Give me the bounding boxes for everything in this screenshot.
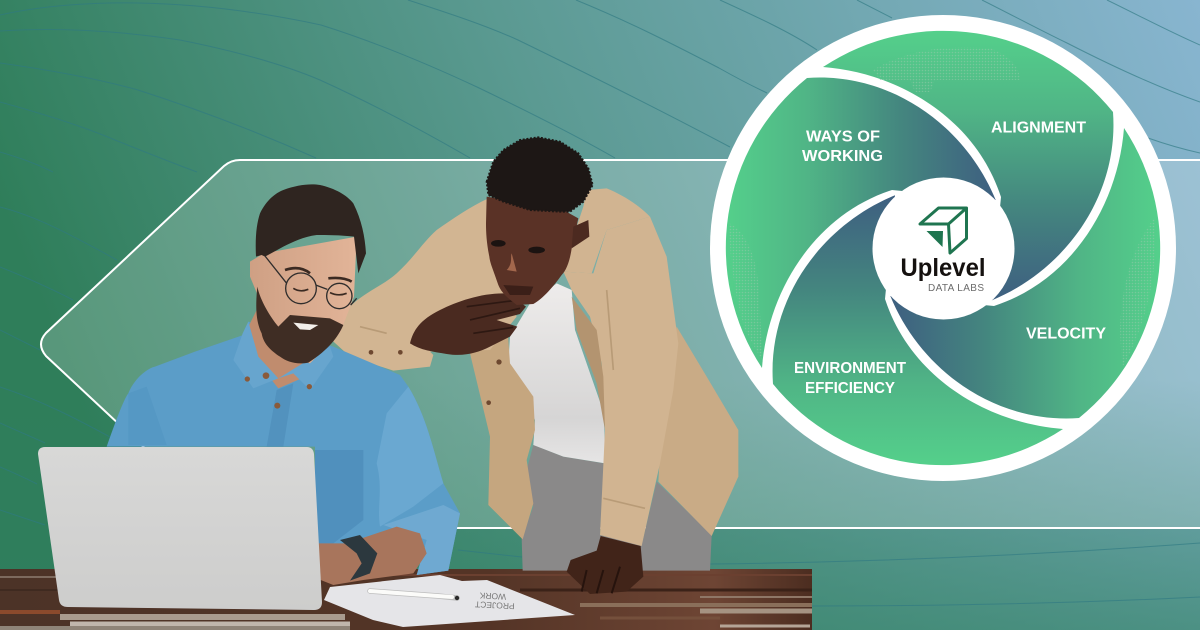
wordmark: Uplevel: [900, 254, 986, 282]
blade: velocity: [890, 128, 1160, 418]
panel: chevron banner: [41, 160, 1200, 528]
icon: cube: [920, 208, 966, 253]
hand on table: [567, 536, 643, 594]
face: [250, 237, 357, 363]
person: seated man in blue shirt: [107, 184, 460, 585]
blade: ways of working: [726, 78, 996, 368]
label: ways of working: WAYS OF: [806, 128, 880, 146]
paper document on table: [324, 575, 575, 627]
halftone textures: [729, 47, 1156, 368]
blade: environment efficiency: [773, 195, 1063, 465]
raised hand: [410, 293, 526, 355]
head: [486, 197, 578, 305]
hair: [256, 184, 366, 273]
paper document on table: WORK: [479, 591, 506, 602]
beard: [256, 287, 343, 363]
label: environment efficiency: [794, 360, 907, 397]
tagline: DATA LABS: [928, 283, 984, 294]
label: ways of working: [802, 128, 883, 165]
centre white disc: [872, 178, 1014, 320]
laptop: [38, 447, 322, 610]
paper document on table: PROJECT: [475, 599, 515, 611]
label: alignment: ALIGNMENT: [991, 120, 1087, 136]
wooden table: [0, 569, 812, 630]
glasses: [265, 256, 357, 309]
outer white disc: [710, 15, 1176, 481]
label: velocity: VELOCITY: [1026, 326, 1107, 342]
label: ways of working: WORKING: [802, 148, 883, 165]
label: environment efficiency: EFFICIENCY: [805, 380, 896, 397]
smart watch: [340, 535, 377, 581]
logo: Uplevel Data Labs: [900, 208, 986, 294]
swirl diagram: [710, 15, 1176, 481]
hair: [487, 137, 593, 212]
label: environment efficiency: ENVIRONMENT: [794, 360, 907, 377]
neck: [245, 310, 330, 388]
forearm and hand: [318, 527, 427, 585]
person: standing man in tan jacket: [332, 137, 738, 594]
blade: alignment: [823, 31, 1113, 301]
pen: [370, 591, 459, 600]
